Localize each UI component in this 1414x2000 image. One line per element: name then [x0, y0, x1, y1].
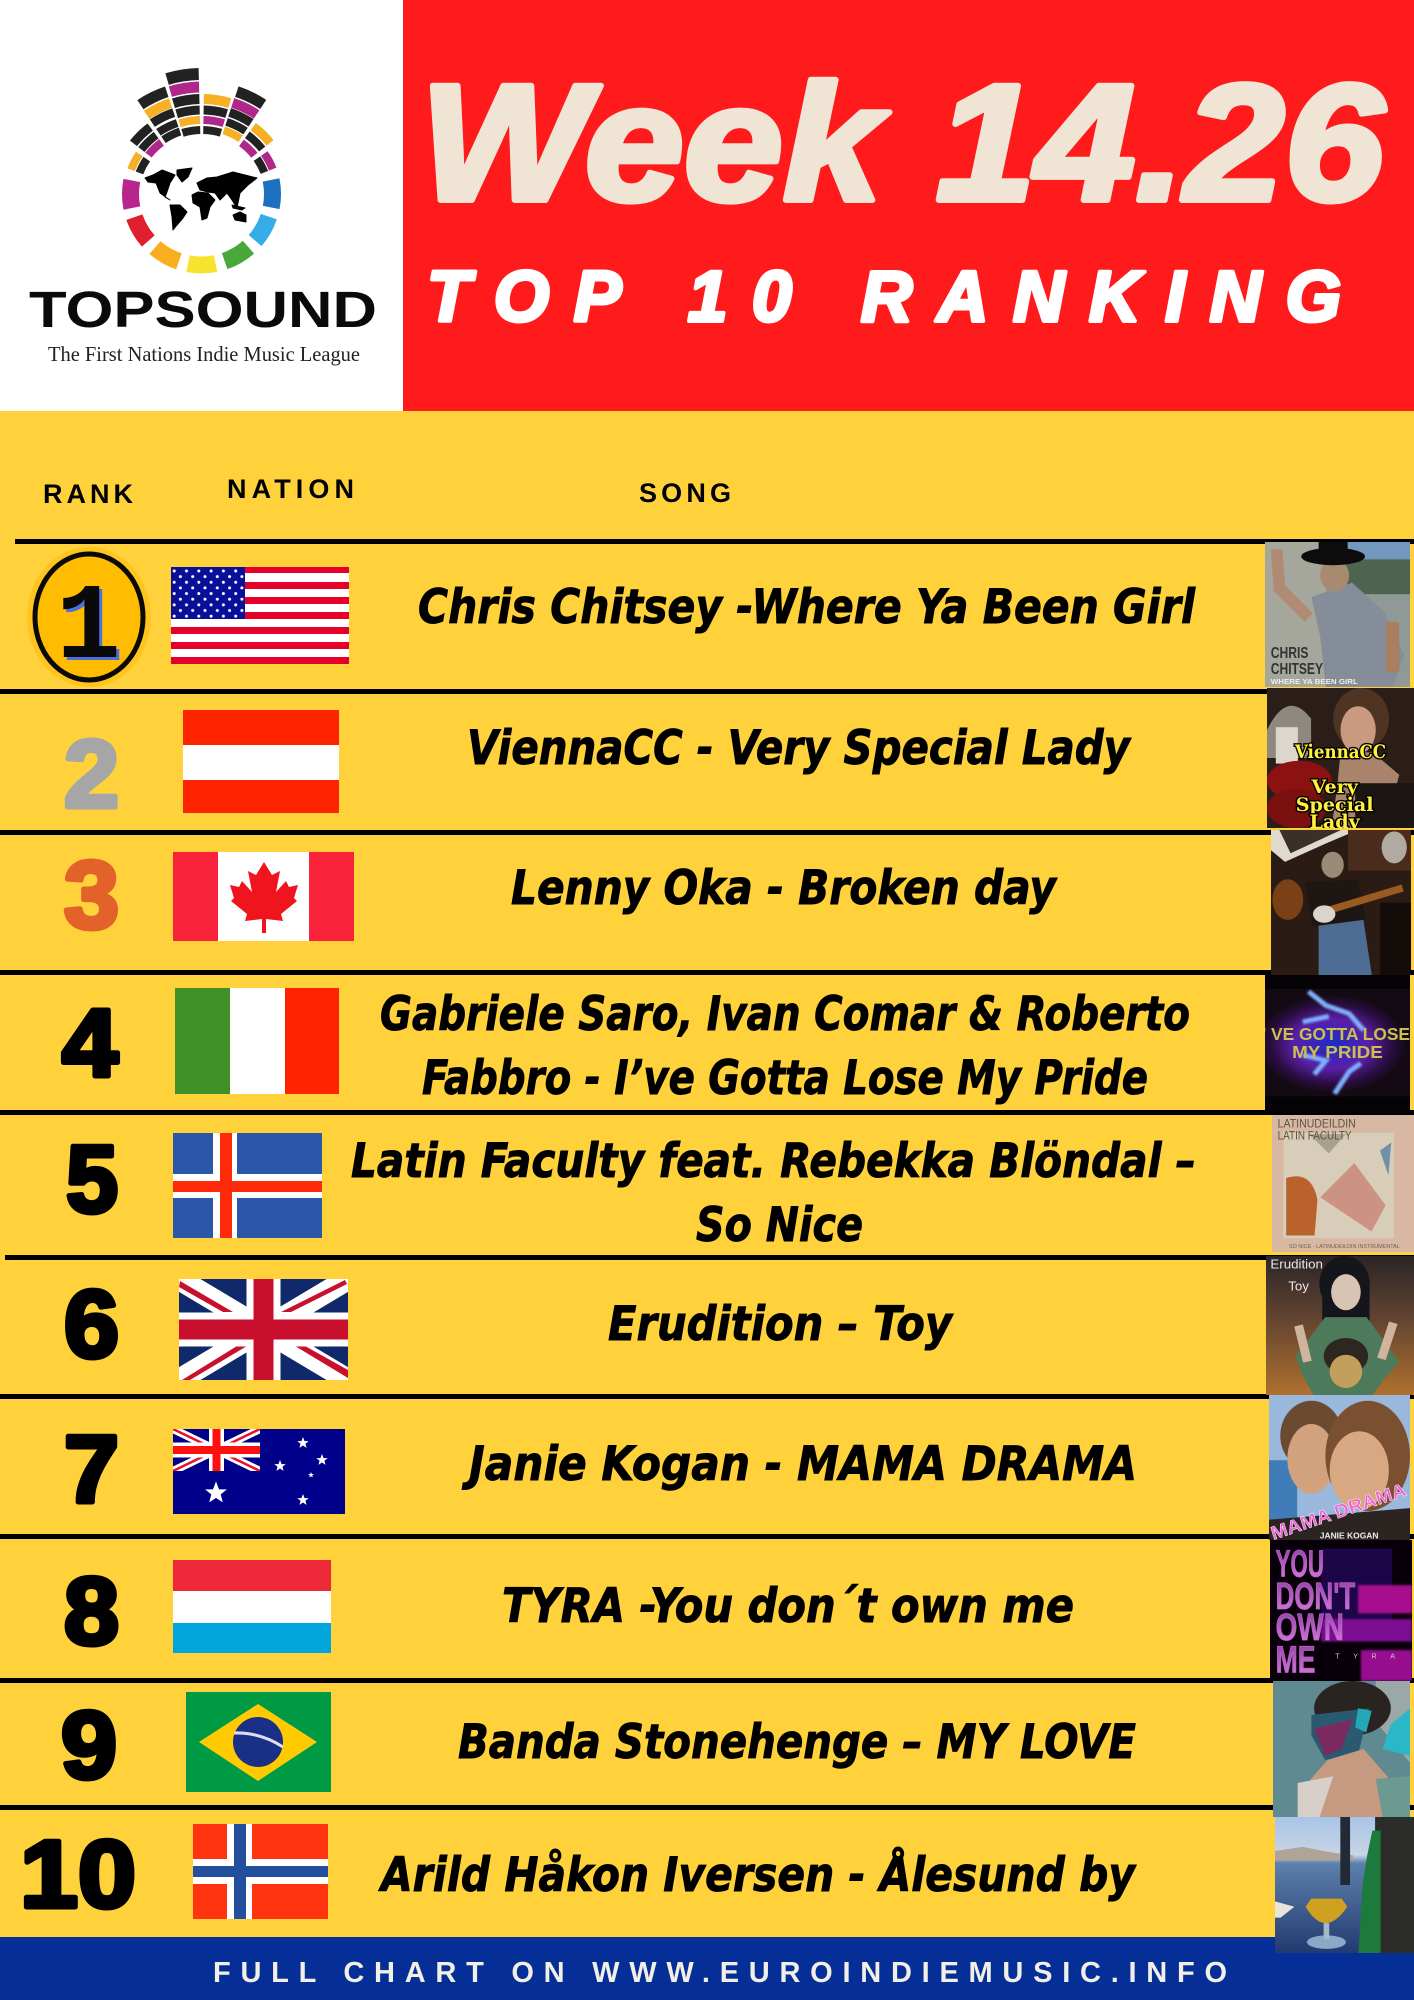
logo wordmark: TOPSOUND	[29, 281, 377, 338]
title panel	[403, 0, 1414, 411]
song 4	[380, 987, 1190, 1106]
rank 8: 8	[64, 1558, 119, 1665]
song 4: Gabriele Saro, Ivan Comar & Roberto	[380, 987, 1190, 1042]
logo: world map	[145, 168, 257, 230]
song 9: Banda Stonehenge – MY LOVE	[458, 1715, 1136, 1770]
rank 6: 6	[64, 1271, 119, 1378]
cover 1: Chris Chitsey	[1265, 542, 1410, 687]
cover 6: Erudition Toy: Erudition	[1270, 1257, 1323, 1271]
song 5	[351, 1134, 1196, 1253]
cover 6: Erudition Toy	[1266, 1256, 1414, 1395]
logo: equalizer arcs	[48, 43, 356, 351]
flag canton: USA stars	[171, 567, 245, 619]
cover 6: Erudition Toy: Toy	[1288, 1279, 1309, 1294]
column headers: NATION	[227, 474, 354, 504]
cover 8: You Don't Own Me: ME	[1276, 1639, 1315, 1682]
cover 4: I've Gotta Lose My Pride	[1262, 975, 1410, 1110]
song 5: So Nice	[696, 1198, 863, 1253]
cover 4: I've Gotta Lose My Pride: MY PRIDE	[1292, 1041, 1383, 1062]
cover 1: Chris Chitsey: CHITSEY	[1271, 661, 1323, 678]
cover 8: You Don't Own Me: OWN	[1276, 1606, 1344, 1649]
cover 2: ViennaCC: Lady	[1309, 811, 1361, 833]
cover 8: You Don't Own Me: TYRA	[1335, 1653, 1395, 1660]
cover 5: Latin Faculty: SO NICE - LATINUDEILDIN INSTRUMENTAL	[1289, 1244, 1400, 1250]
cover 5: Latin Faculty: LATINUDEILDIN	[1278, 1117, 1356, 1130]
song 10: Arild Håkon Iversen - Ålesund by	[378, 1848, 1137, 1903]
cover 2: ViennaCC: ViennaCC	[1294, 741, 1386, 763]
flag: Canada	[173, 852, 354, 941]
rank 1 badge	[27, 547, 151, 693]
cover 7: Mama Drama: JANIE KOGAN	[1320, 1530, 1378, 1541]
cover 1: Chris Chitsey: WHERE YA BEEN GIRL	[1271, 677, 1358, 686]
rank 2: 2	[64, 721, 119, 828]
cover 5: Latin Faculty: LATIN FACULTY	[1278, 1129, 1352, 1143]
cover 2: ViennaCC: Very	[1310, 776, 1359, 798]
flag: USA	[171, 567, 349, 664]
song 7: Janie Kogan - MAMA DRAMA	[462, 1437, 1137, 1492]
flag: Australia	[173, 1429, 345, 1514]
cover 8: You Don't Own Me: DON'T	[1276, 1575, 1355, 1618]
cover 10: Alesund	[1275, 1817, 1414, 1953]
column headers	[43, 474, 731, 509]
rank 9: 9	[61, 1692, 117, 1799]
song 4: Fabbro - I’ve Gotta Lose My Pride	[422, 1051, 1148, 1106]
flag: Brazil	[186, 1692, 331, 1792]
song 2: ViennaCC - Very Special Lady	[467, 721, 1132, 776]
rank 1 badge: 1	[59, 571, 124, 693]
cover 1: Chris Chitsey: CHRIS	[1271, 645, 1308, 662]
footer text: FULL CHART ON WWW.EUROINDIEMUSIC.INFO	[213, 1957, 1227, 1989]
rank 5: 5	[66, 1126, 118, 1233]
cover 9: Banda Stonehenge	[1273, 1681, 1410, 1817]
cover 2: ViennaCC	[1267, 688, 1414, 833]
cover 8: You Don't Own Me: YOU	[1276, 1543, 1324, 1586]
song 1: Chris Chitsey -Where Ya Been Girl	[418, 580, 1196, 635]
cover 5: Latin Faculty	[1272, 1115, 1414, 1252]
subtitle: TOP 10 RANKING	[427, 258, 1341, 337]
song 3: Lenny Oka - Broken day	[511, 861, 1058, 916]
title: week number: 14.26	[936, 51, 1386, 236]
song 8: TYRA -You don´t own me	[502, 1579, 1074, 1634]
cover 8: You Don't Own Me	[1270, 1540, 1412, 1682]
rank 4: 4	[62, 990, 118, 1097]
cover 7: Mama Drama	[1268, 1395, 1410, 1544]
flag: Austria	[183, 710, 339, 813]
song 6: Erudition – Toy	[608, 1297, 954, 1352]
logo panel	[0, 0, 403, 411]
column headers: SONG	[639, 478, 731, 508]
flag: Italy	[175, 988, 339, 1094]
song 5: Latin Faculty feat. Rebekka Blöndal –	[351, 1134, 1196, 1189]
rank 3: 3	[64, 842, 119, 949]
cover 2: ViennaCC: Special	[1296, 795, 1374, 816]
title: week number: Week	[420, 51, 890, 236]
rank 1 badge: 1	[56, 568, 121, 690]
flag: United Kingdom	[179, 1279, 348, 1380]
cover 7: Mama Drama: MAMA DRAMA	[1268, 1479, 1409, 1544]
footer bar	[0, 1937, 1414, 2000]
cover 3: Lenny Oka	[1271, 830, 1411, 975]
flag: Iceland	[173, 1133, 322, 1238]
logo: coloured ring	[101, 94, 302, 294]
rank 10: 10	[20, 1821, 136, 1928]
logo tagline: The First Nations Indie Music League	[48, 342, 360, 366]
rank 7: 7	[64, 1416, 119, 1523]
column headers: RANK	[43, 479, 134, 509]
title: week number	[420, 51, 1386, 236]
flag: Luxembourg	[173, 1560, 331, 1653]
flag: Norway	[193, 1824, 328, 1919]
